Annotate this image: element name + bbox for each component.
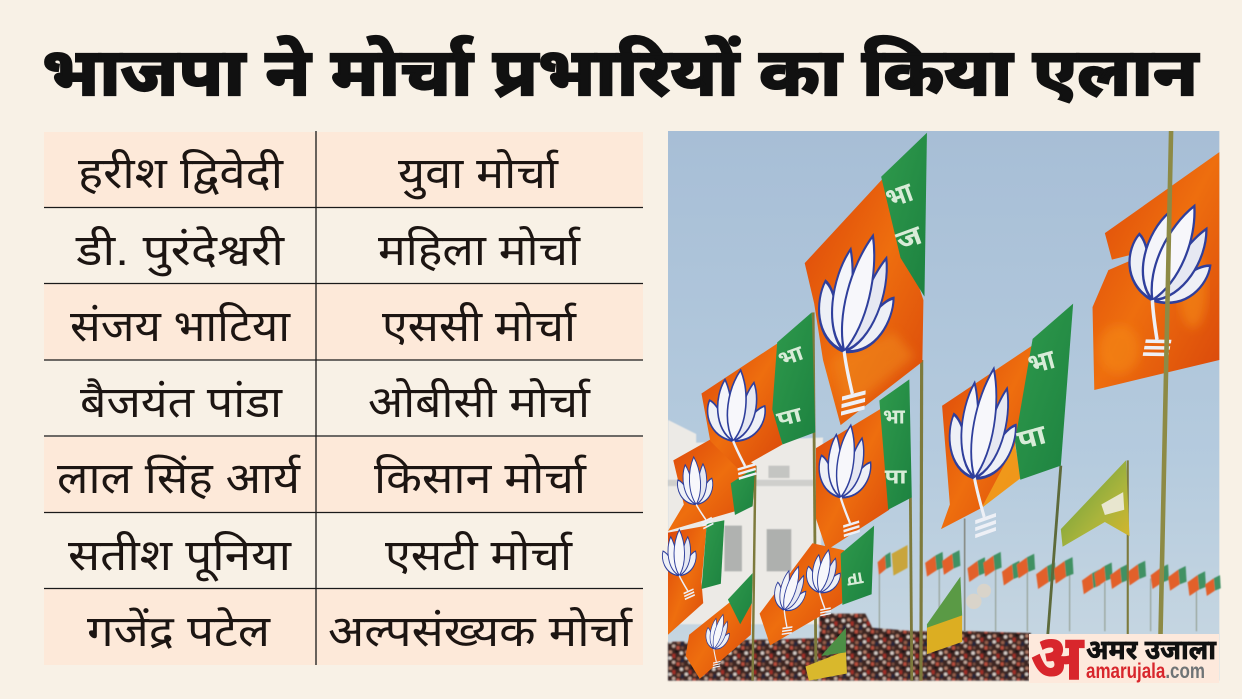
row 2 [75,225,581,277]
logo mark: अ [1031,624,1084,693]
flag: yellow-green small [1061,460,1130,547]
title: भाजपा ने मोर्चा प्रभारियों का किया एलान [42,35,1200,109]
flag: centre [810,379,912,550]
row 2: डी. पुरंदेश्वरी [75,225,285,277]
row 7: गजेंद्र पटेल [87,606,271,656]
row 1: युवा मोर्चा [398,149,559,200]
panel: table of morcha in-charges [44,131,643,665]
flag: bottom-left [686,573,753,679]
flag: right centre [932,304,1073,540]
flag: large top: ज [892,219,926,256]
flag: centre: पा [885,466,908,488]
flag: lower-centre [760,526,874,645]
row 4: ओबीसी मोर्चा [368,378,591,427]
photo: BJP flags at a rally [662,131,1231,681]
flag: lower-left [662,520,724,635]
row 6: एसटी मोर्चा [385,531,573,580]
row 7: अल्पसंख्यक मोर्चा [328,607,633,656]
row 5: लाल सिंह आर्य [57,454,301,503]
flag: right centre: पा [1014,418,1050,456]
row 6: सतीश पूनिया [68,531,292,582]
logo url: amarujala.com [1086,660,1205,683]
logo wordmark: अमर उजाला [1086,635,1217,665]
row 1: हरीश द्विवेदी [78,148,284,198]
flag: large top: भा [881,176,918,214]
building [668,420,823,624]
row 5: किसान मोर्चा [374,454,587,503]
row of small distant flags [878,545,1221,631]
row 1 [78,148,559,200]
flag: right centre: भा [1024,343,1059,380]
row 3: एससी मोर्चा [382,302,577,351]
row 4: बैजयंत पांडा [80,378,283,427]
loudspeakers [966,584,991,609]
row 7 [87,606,633,656]
logo: Amar Ujala [1029,624,1219,693]
row 6 [68,531,573,582]
flag: left upper: भा [775,341,807,372]
flag: left upper: पा [774,403,805,432]
table row shading [44,132,643,665]
flag: left middle [668,438,756,531]
row 3 [70,302,577,351]
row 5 [57,454,587,503]
flag: left upper [701,312,815,481]
flag: far right [1093,131,1231,635]
poles [753,312,1128,681]
flag: large top [794,133,927,425]
crowd [668,614,1031,681]
row 2: महिला मोर्चा [378,226,581,275]
flag: centre: भा [883,406,906,428]
flag: green-yellow banner in crowd [805,628,847,681]
flag: bottom green-yellow [927,577,962,654]
row 4 [80,378,591,427]
flag: lower-centre: पा [845,568,865,591]
row 3: संजय भाटिया [70,302,291,351]
